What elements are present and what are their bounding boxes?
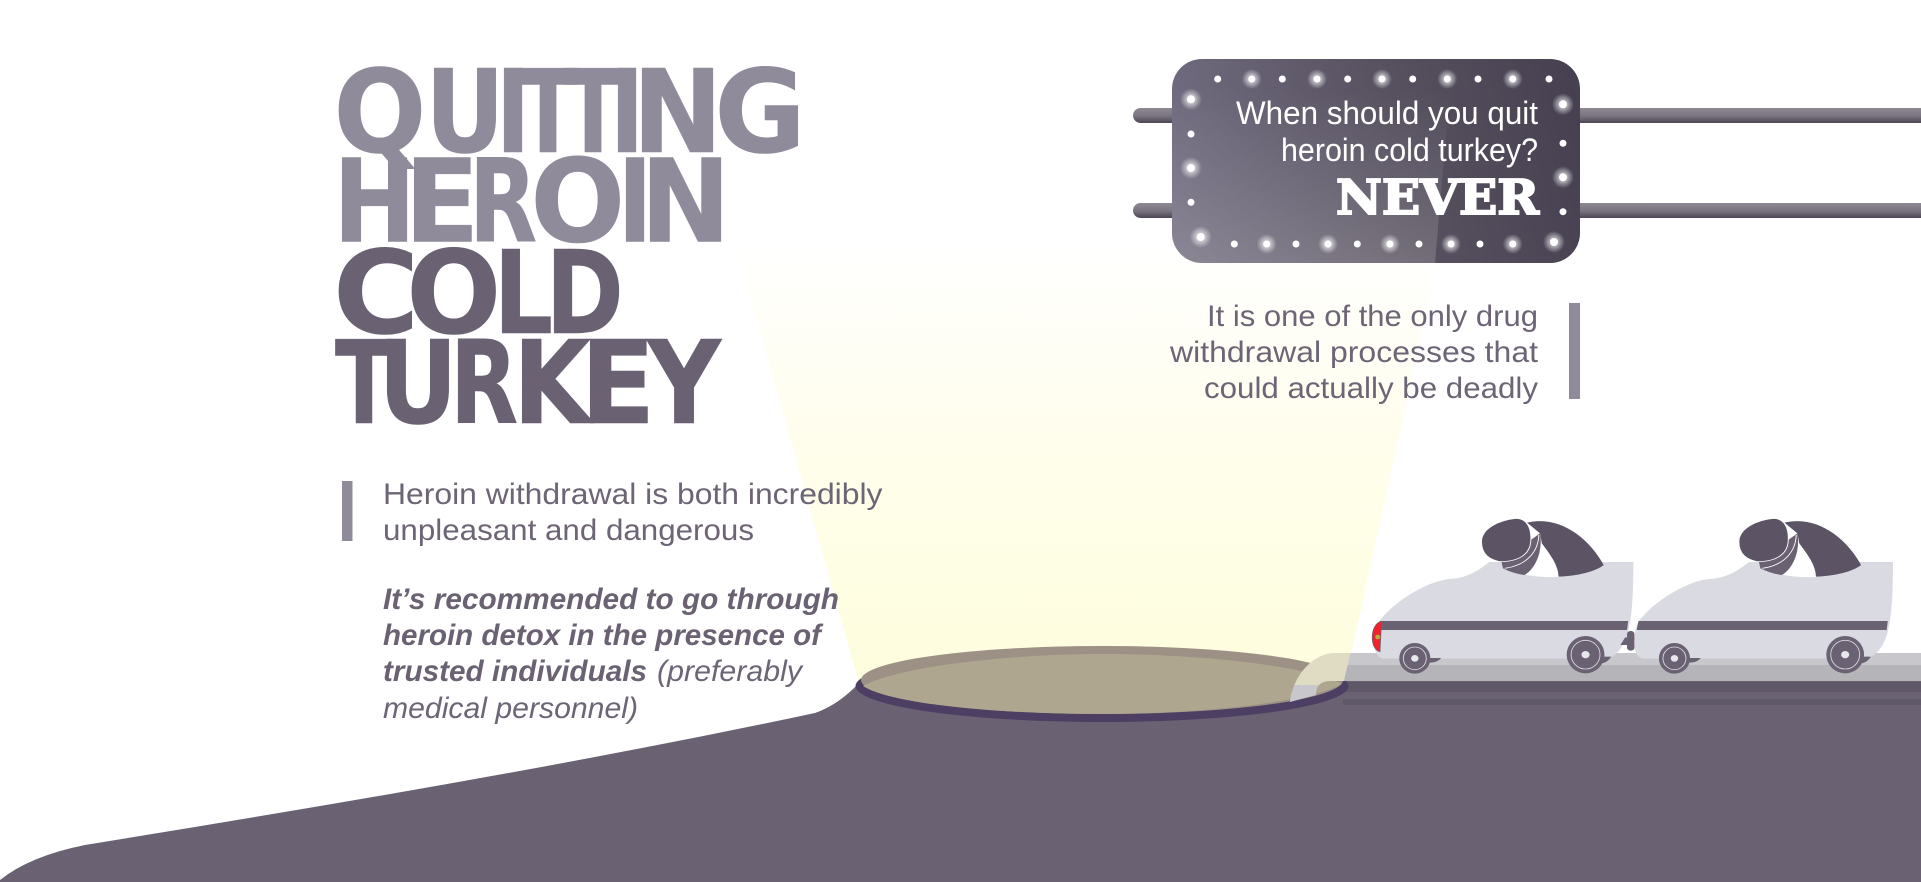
spotlight beam — [737, 250, 1440, 690]
title — [333, 46, 806, 451]
car 2 cockpit opening — [1771, 543, 1817, 577]
title line: TURKEY: T — [335, 317, 393, 451]
car 1 coupler — [1620, 631, 1634, 651]
marquee sign — [1172, 59, 1580, 263]
title line: COLD: O — [406, 227, 501, 361]
left text block: Heroin withdrawal is both incredibly — [383, 478, 882, 511]
title line: QUITTING: U — [425, 46, 505, 180]
title line: HEROIN: N — [640, 136, 731, 270]
right text block: withdrawal processes that — [1169, 336, 1539, 369]
sign lights — [1180, 69, 1574, 254]
title line: HEROIN: R — [469, 136, 537, 270]
title line: HEROIN: H — [333, 136, 416, 270]
left text block: (preferably — [657, 655, 804, 688]
track — [1290, 653, 1921, 702]
title line: QUITTING: I — [496, 46, 531, 180]
left text block: trusted individuals — [383, 655, 647, 688]
left text block: heroin detox in the presence of — [383, 619, 824, 652]
car 2 — [1634, 518, 1893, 674]
sign question — [1236, 95, 1538, 168]
sign question: heroin cold turkey? — [1281, 132, 1538, 168]
car 1 tail light — [1372, 621, 1381, 652]
title line: TURKEY: K — [513, 317, 594, 451]
title line: QUITTING: Q — [334, 46, 426, 180]
title line: TURKEY: U — [378, 317, 458, 451]
left text block: medical personnel) — [383, 692, 638, 725]
track stripes — [1343, 682, 1921, 705]
sign support posts — [1133, 108, 1921, 218]
title line: HEROIN: E — [404, 136, 480, 270]
title line: QUITTING: I — [610, 46, 645, 180]
left text block: It’s recommended to go through — [383, 583, 839, 616]
title line: QUITTING: N — [632, 46, 723, 180]
title line: COLD: D — [546, 227, 624, 361]
title line: HEROIN: I — [618, 136, 653, 270]
car 1 — [1372, 518, 1634, 674]
car 1 front wheel — [1567, 636, 1611, 673]
right text block — [1169, 300, 1539, 405]
left text block: unpleasant and dangerous — [383, 514, 754, 547]
title line: QUITTING: T — [564, 46, 622, 180]
sign question: When should you quit — [1236, 95, 1538, 131]
car 2 rear wheel — [1659, 643, 1701, 674]
right text block: could actually be deadly — [1204, 372, 1538, 405]
right text block: It is one of the only drug — [1207, 300, 1538, 333]
left accent bar — [342, 481, 352, 541]
car 2 front wheel — [1826, 636, 1871, 673]
title line: TURKEY: R — [450, 317, 518, 451]
title line: QUITTING: G — [714, 46, 806, 180]
car 2 body — [1634, 562, 1893, 659]
car 1 driver — [1481, 518, 1604, 577]
car 2 side stripe — [1637, 621, 1888, 630]
right accent bar — [1569, 303, 1580, 399]
car 1 rear wheel — [1399, 643, 1441, 674]
stage platform — [856, 646, 1348, 722]
title line: TURKEY: E — [580, 317, 656, 451]
title line: TURKEY: Y — [645, 317, 723, 451]
title line: COLD: C — [333, 227, 419, 361]
car 2 driver — [1739, 518, 1861, 577]
ground hill — [0, 681, 1921, 882]
title line: COLD: L — [494, 227, 553, 361]
title line: QUITTING: T — [519, 46, 577, 180]
left text block — [383, 478, 882, 725]
car 1 body — [1373, 562, 1633, 659]
sign answer: NEVER: NEVER — [1336, 170, 1540, 226]
car 1 side stripe — [1380, 621, 1628, 630]
title line: HEROIN: O — [530, 136, 625, 270]
car 1 cockpit opening — [1514, 543, 1559, 577]
